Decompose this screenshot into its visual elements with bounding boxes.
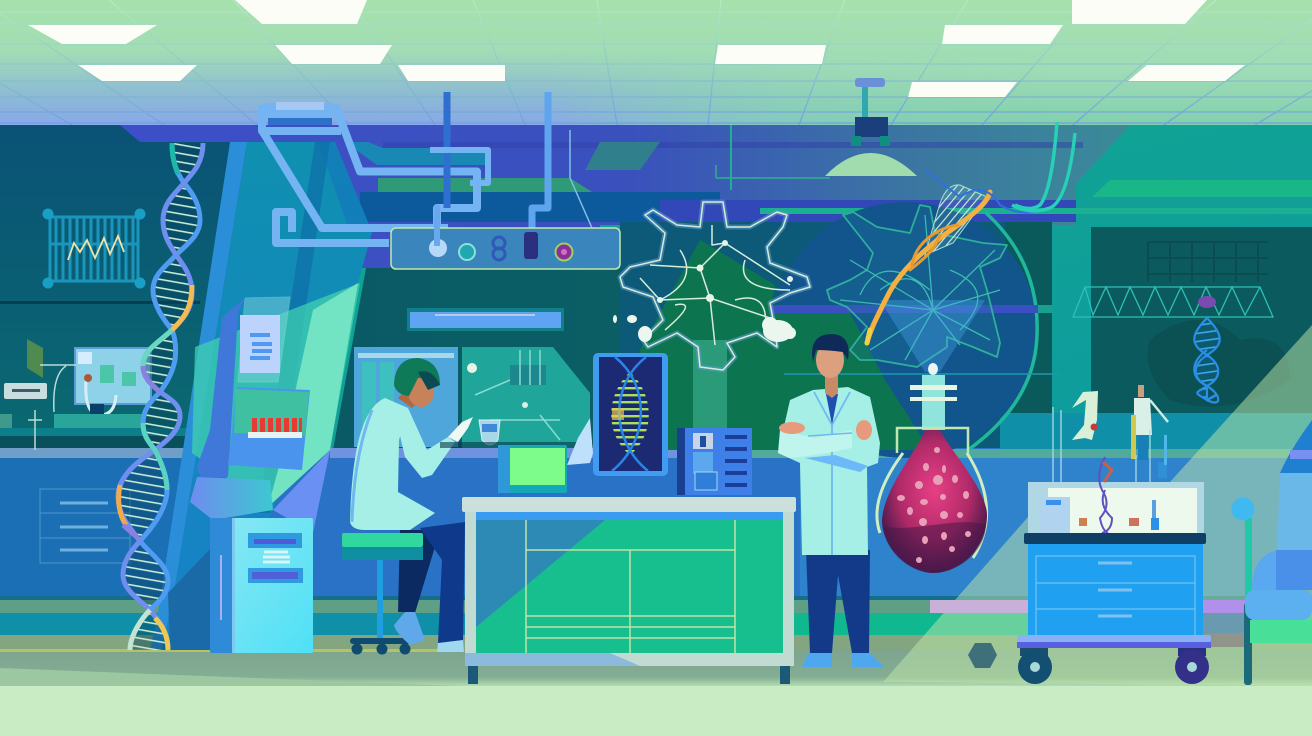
lab coat	[778, 387, 880, 555]
back wall left	[0, 125, 260, 450]
wall trim stripe under light	[930, 600, 1245, 647]
lower wall	[0, 413, 1312, 598]
wall truss	[1073, 287, 1273, 317]
dark wall panel right	[1091, 227, 1312, 413]
hanging cables right	[925, 122, 1075, 212]
ceiling	[0, 0, 1312, 126]
trousers	[806, 550, 870, 653]
big translucent dome	[770, 202, 1052, 458]
technician second sleeve	[567, 418, 593, 465]
small floor bolt	[968, 643, 997, 668]
lab bench dark edge	[440, 442, 600, 448]
horizontal measuring line	[784, 373, 1060, 375]
cart with equipment	[1017, 457, 1211, 684]
network core glow	[880, 300, 985, 372]
shoes	[802, 653, 832, 667]
filing cabinet	[210, 518, 313, 653]
left wall divider	[0, 301, 200, 304]
scientist standing	[778, 334, 884, 667]
translucent floor light right	[883, 325, 1312, 686]
sample analyser device	[677, 428, 752, 495]
upper indigo band	[120, 125, 1130, 268]
glass sample tower	[197, 297, 310, 477]
wall chart with waveform	[42, 208, 146, 288]
side bench with monitor	[0, 339, 151, 450]
left wall drawer	[40, 489, 130, 563]
crossed arms	[778, 430, 852, 458]
equipment control unit	[391, 205, 620, 269]
main lab table	[462, 497, 796, 684]
glove	[448, 417, 473, 442]
large DNA helix	[118, 143, 203, 650]
wall display strip	[407, 308, 564, 331]
flask with red liquid	[877, 363, 987, 573]
dark wall panel centre	[1005, 222, 1052, 414]
back wall right	[0, 125, 1312, 455]
miniature figures on cart	[1053, 385, 1168, 532]
ceiling bulkhead stripes	[345, 142, 1083, 222]
lab coat	[350, 398, 435, 530]
orange DNA strand	[867, 185, 990, 343]
neck and head	[398, 392, 420, 408]
periwinkle wall wedge	[273, 450, 330, 533]
middle lab wall	[333, 268, 740, 450]
head	[825, 372, 838, 398]
ceiling lights	[28, 0, 1245, 97]
sample beaker	[479, 420, 500, 445]
ceiling lamp	[716, 78, 917, 190]
DNA display screen	[593, 353, 668, 476]
pillar foot shape	[190, 477, 273, 520]
shoes	[394, 612, 425, 645]
green screen monitor	[498, 445, 567, 493]
examination chair right	[1232, 420, 1312, 685]
lower wall stripes and floor	[0, 596, 1312, 736]
cellular network structure left	[620, 202, 810, 370]
trousers	[398, 530, 440, 613]
pillar	[150, 142, 372, 650]
green wall panel	[600, 240, 930, 450]
stool	[342, 533, 423, 654]
small cloud and droplets	[613, 315, 796, 342]
light beam on pillar	[192, 283, 360, 507]
wall monitors behind technician	[354, 347, 590, 448]
small DNA helix on wall	[1194, 296, 1220, 402]
overhead ducts	[262, 92, 592, 247]
teal ledge right	[760, 180, 1312, 214]
technician seated	[342, 358, 473, 654]
blue wall behind cells	[620, 222, 1005, 450]
cellular network structure right	[827, 205, 1007, 367]
